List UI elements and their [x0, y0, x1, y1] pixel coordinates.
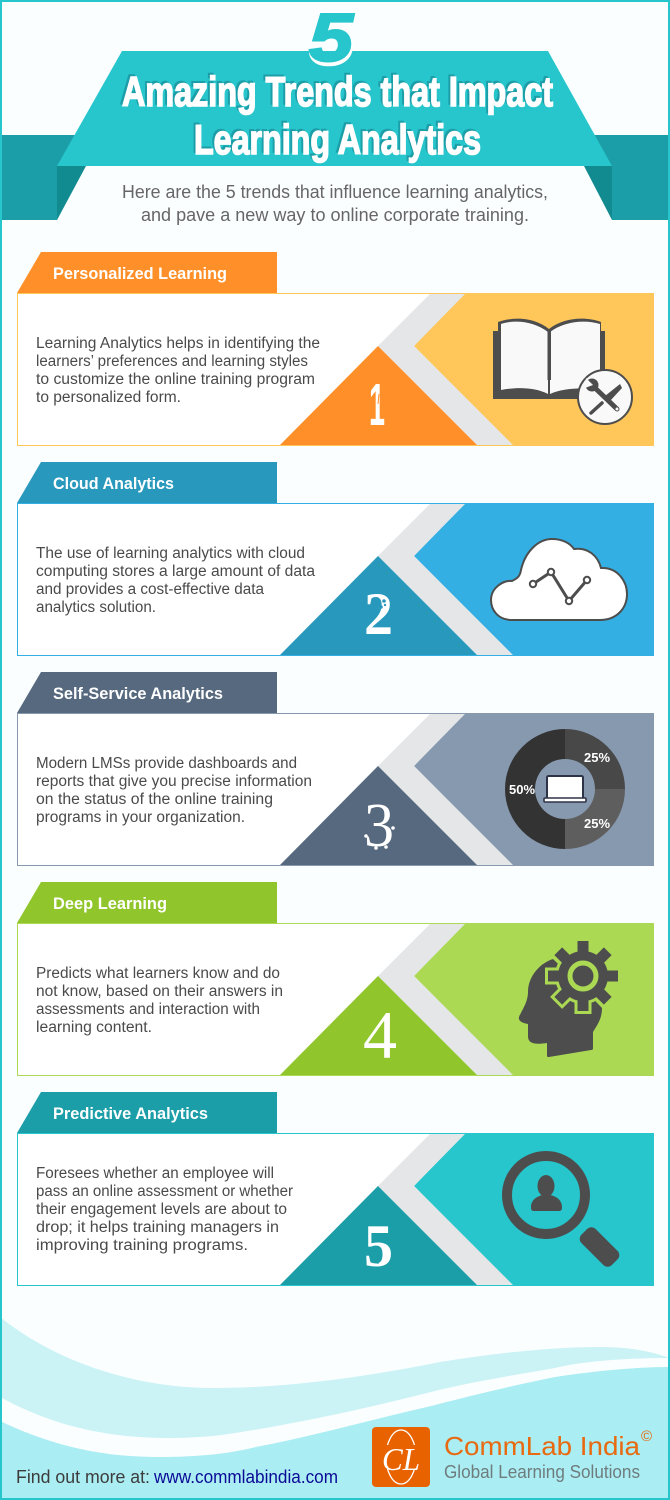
text: cloud analytics: The use of learning analytics with cloud — [36, 545, 305, 562]
text: predictive analytics: their engagement levels are about to — [36, 1201, 287, 1218]
text: cloud analytics: analytics solution. — [36, 599, 156, 616]
heading: cloud analytics: Cloud Analytics — [53, 474, 174, 493]
text: cloud analytics: and provides a cost-effective data — [36, 581, 264, 598]
intro text — [122, 182, 548, 225]
heading: deep learning: Deep Learning — [53, 894, 167, 913]
heading: personalized learning — [17, 252, 277, 293]
icon: laptop — [544, 776, 586, 802]
icon: cloud with line chart — [491, 539, 627, 620]
title: Amazing Trends that Impact — [122, 68, 553, 115]
text: personalized learning: to customize the online training program — [36, 371, 315, 388]
title — [120, 66, 553, 163]
icon: magnifier with person — [507, 1156, 622, 1269]
text: cloud analytics: computing stores a large amount of data — [36, 563, 315, 580]
text: predictive analytics — [36, 1165, 293, 1254]
footer link text: www.commlabindia.com — [153, 1467, 338, 1487]
footer link text — [16, 1467, 338, 1487]
logo: CommLab India: Global Learning Solutions — [444, 1462, 640, 1482]
text: deep learning: learning content. — [36, 1019, 152, 1036]
text: predictive analytics: drop; it helps training managers in — [36, 1219, 279, 1236]
intro text: Here are the 5 trends that influence learning analytics, — [122, 182, 548, 202]
heading: deep learning — [17, 882, 277, 923]
panel: predictive analytics — [17, 1092, 654, 1286]
intro text: and pave a new way to online corporate training. — [141, 205, 529, 225]
text: predictive analytics: pass an online assessment or whether — [36, 1183, 293, 1200]
panel: self-service analytics — [17, 672, 654, 866]
text: deep learning: Predicts what learners know and do — [36, 965, 280, 982]
text: self-service analytics: reports that give you precise information — [36, 773, 312, 790]
chart: donut 50/25/25 — [505, 729, 625, 849]
panel: deep learning — [17, 882, 654, 1076]
logo: CommLab India: © — [641, 1428, 652, 1445]
text: self-service analytics: on the status of the online training — [36, 791, 273, 808]
heading: cloud analytics — [17, 462, 277, 503]
heading: predictive analytics: Predictive Analytics — [53, 1104, 208, 1123]
icon: head with gear — [519, 941, 618, 1057]
number 4: 4 — [363, 997, 397, 1073]
panel: cloud analytics — [17, 462, 654, 656]
panel: personalized learning — [17, 252, 654, 446]
text: cloud analytics — [36, 545, 315, 616]
text: personalized learning: to personalized form. — [36, 389, 181, 406]
chart: donut 50/25/25: 25% — [584, 750, 610, 765]
number 5: 5 — [364, 1213, 393, 1279]
heading: self-service analytics — [17, 672, 277, 713]
text: predictive analytics: Foresees whether an employee will — [36, 1165, 274, 1182]
text: personalized learning: Learning Analytics helps in identifying the — [36, 335, 320, 352]
text: deep learning: not know, based on their answers in — [36, 983, 283, 1000]
number 3: 3 — [364, 792, 394, 860]
footer waves — [0, 1317, 670, 1500]
text: predictive analytics: improving training programs. — [36, 1237, 248, 1254]
text: deep learning: assessments and interaction with — [36, 1001, 260, 1018]
text: personalized learning — [36, 335, 320, 406]
panel: personalized learning: 1 — [369, 372, 385, 438]
text: self-service analytics — [36, 755, 312, 826]
text: deep learning — [36, 965, 283, 1036]
banner ribbon — [0, 51, 670, 220]
icon: book and tools — [493, 319, 632, 424]
title numeral 5: 5 — [309, 0, 354, 76]
title: Learning Analytics — [194, 116, 481, 163]
heading: self-service analytics: Self-Service Analytics — [53, 684, 223, 703]
logo: CommLab India: CL — [382, 1441, 420, 1477]
logo: CommLab India — [372, 1427, 652, 1487]
chart: donut 50/25/25: 25% — [584, 816, 610, 831]
logo: CommLab India: CommLab India — [444, 1431, 641, 1461]
text: self-service analytics: Modern LMSs provide dashboards and — [36, 755, 297, 772]
title: Amazing Trends that Impact — [120, 66, 551, 113]
heading: personalized learning: Personalized Learning — [53, 264, 227, 283]
heading: predictive analytics — [17, 1092, 277, 1133]
title: Learning Analytics — [192, 114, 479, 161]
text: self-service analytics: programs in your organization. — [36, 809, 245, 826]
number 1 — [369, 372, 385, 438]
text: personalized learning: learners’ preferences and learning styles — [36, 353, 308, 370]
number 2: 2 — [364, 581, 393, 647]
title numeral 5: 5 — [309, 1, 356, 81]
chart: donut 50/25/25: 50% — [509, 782, 535, 797]
footer link text: Find out more at: — [16, 1467, 150, 1487]
